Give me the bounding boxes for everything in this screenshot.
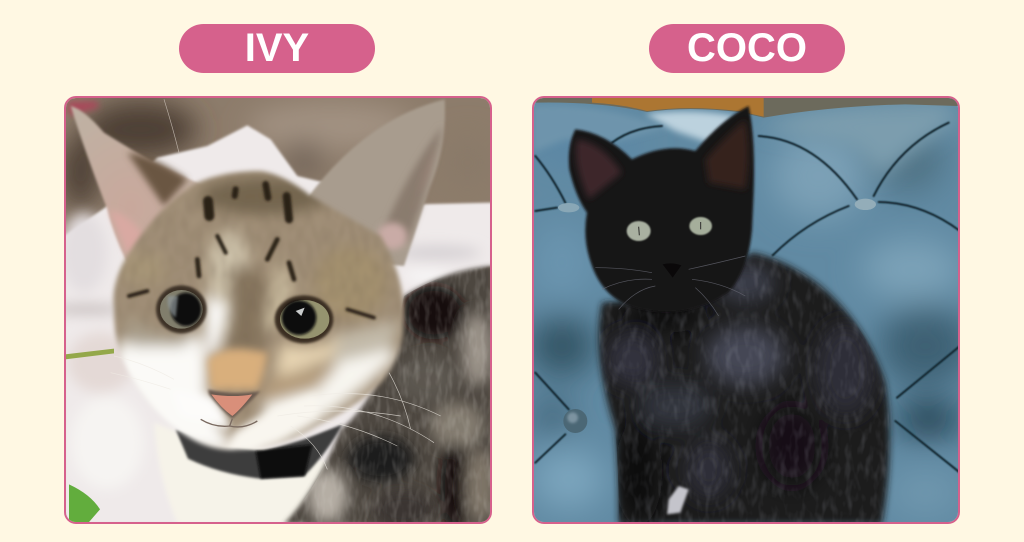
tabby face markings bbox=[129, 184, 374, 318]
right eye bbox=[275, 295, 333, 343]
heading: COCO name pill: COCO bbox=[687, 26, 807, 70]
icon: green leaf and stem bbox=[66, 349, 114, 524]
light chest spot bbox=[667, 486, 689, 514]
nose and mouth bbox=[201, 389, 261, 427]
illustration: tabby body bbox=[284, 263, 496, 529]
background: tufted leather sofa bbox=[529, 96, 972, 524]
heading: IVY name pill bbox=[179, 24, 375, 73]
panel: Ivy photo bbox=[64, 96, 492, 524]
left eye bbox=[156, 285, 207, 333]
illustration: black cat head and ears bbox=[569, 106, 754, 316]
panel: Coco photo bbox=[532, 96, 960, 524]
illustration: tabby ears bbox=[71, 99, 445, 266]
illustration: white chest bbox=[154, 423, 331, 524]
right eye bbox=[689, 217, 712, 235]
nose bbox=[663, 263, 681, 278]
illustration: dark collar bbox=[176, 424, 342, 479]
whiskers bbox=[595, 256, 745, 316]
illustration: whiskers bbox=[111, 99, 441, 469]
illustration: tabby head bbox=[110, 168, 407, 454]
background: blanket and white fabric bbox=[51, 96, 497, 524]
fur shading on the face bbox=[198, 172, 374, 350]
heading: COCO name pill bbox=[649, 24, 845, 73]
heading: IVY name pill: IVY bbox=[245, 26, 309, 70]
wall and wooden panel behind sofa bbox=[532, 96, 960, 118]
left eye bbox=[627, 221, 651, 241]
illustration: black cat body bbox=[592, 253, 895, 526]
